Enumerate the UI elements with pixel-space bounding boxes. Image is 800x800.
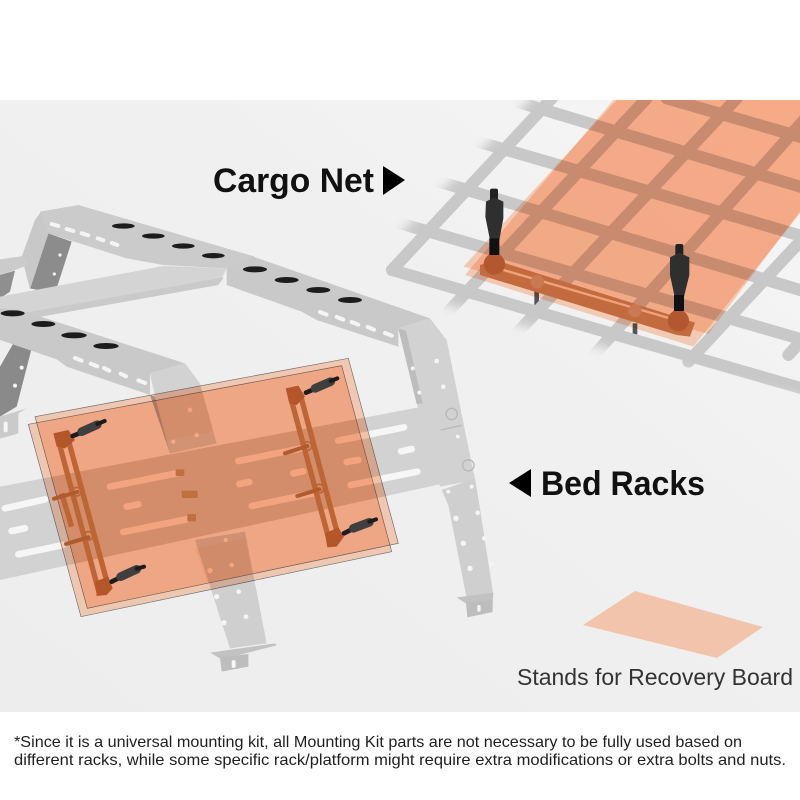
cargo net grid bars: [392, 97, 800, 392]
rack side rail with arch leg: [227, 257, 475, 487]
orange stand plates over rack: [28, 358, 398, 617]
arrow: Cargo Net pointer: [383, 166, 405, 195]
rack rear top rail: [40, 205, 255, 268]
rack leg darker inner: [150, 395, 170, 453]
grey product background: [0, 100, 800, 712]
footnote: *Since it is a universal mounting kit, all Mounting Kit parts are not necessary to be fully used based on: [14, 734, 742, 751]
rack front arch leg: [150, 363, 217, 453]
cargo net supports: [534, 292, 638, 334]
rack rear legs: [0, 211, 72, 439]
footnote: different racks, while some specific rack/platform might require extra modifications or extra bolts and nuts.: [14, 752, 786, 769]
legend swatch: recovery board stand: [583, 591, 763, 658]
heading: Cargo Net: Cargo Net: [213, 162, 374, 200]
rack leg holes: [171, 359, 494, 668]
cargo net right knob: [670, 244, 689, 311]
panel: product illustration on grey background: [0, 97, 800, 712]
cargo net orange bracket: [480, 253, 695, 337]
arrow: Bed Racks pointer: [509, 469, 531, 497]
rack rail slots: [52, 224, 392, 383]
crossbar plate slots: [5, 427, 417, 554]
small centre fittings: [176, 469, 198, 521]
cargo net illustration: [392, 97, 800, 392]
rack front rail: [0, 308, 185, 395]
rack wide crossbar plate: [0, 403, 475, 580]
left stand bracket: [53, 430, 113, 596]
bracket knobs: [73, 378, 376, 582]
cargo net left knob: [485, 189, 503, 255]
footnote: [14, 734, 786, 769]
right stand bracket: [285, 386, 344, 547]
cargo net orange stand plates: [463, 100, 800, 347]
plate joint details: [441, 408, 474, 471]
rack mounting holes: [1, 223, 362, 349]
legend label: recovery board stand: Stands for Recovery Board: [517, 664, 793, 690]
rack crossbar: [0, 266, 226, 316]
heading: Bed Racks: Bed Racks: [541, 465, 705, 503]
rack lower legs: [195, 478, 493, 672]
orange tint on rack parts under plates: [52, 386, 386, 583]
bed rack frame illustration: [0, 205, 494, 672]
